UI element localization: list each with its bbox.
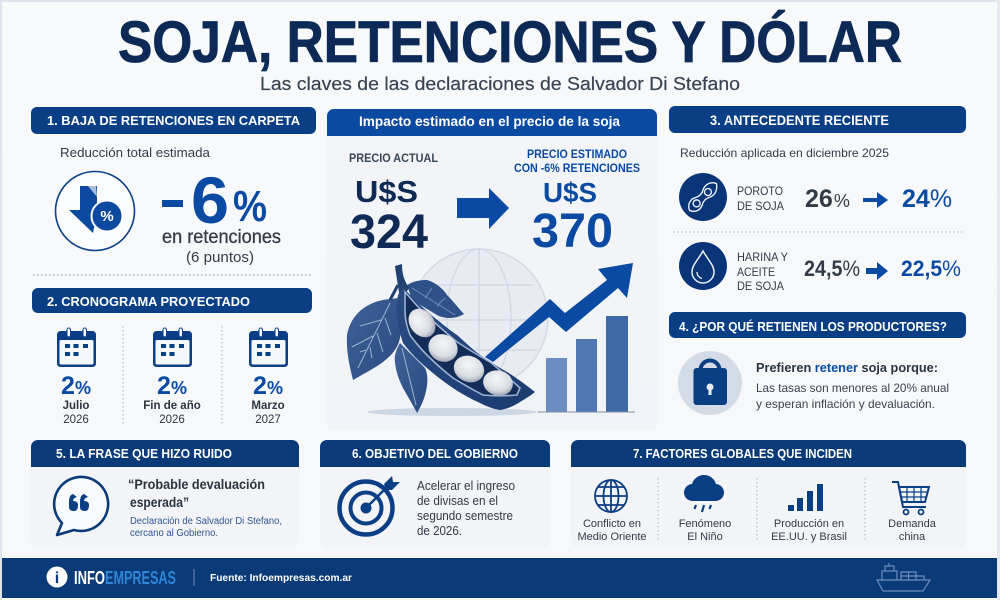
calendar item: julio: 2% [61,372,91,400]
quote [128,476,265,510]
panel 3: antecedente [669,106,966,293]
leaf: bottom [395,343,427,413]
text: prefieren retener: Prefieren retener soja porque: [756,360,938,375]
label: precio estimado [514,147,640,175]
leaf: top [407,280,464,318]
footer [2,558,997,598]
icon: ship [877,563,930,591]
row: harina y aceite: 22,5% [901,256,961,281]
text: 6 puntos: (6 puntos) [186,249,254,266]
text: objetivo [417,479,515,538]
factor: producción [771,484,847,543]
pod body [397,287,535,410]
factor: producción: EE.UU. y Brasil [771,531,847,543]
chart: rising bars [538,316,635,412]
icon: down arrow with percent [56,172,134,250]
row: poroto de soja: DE SOJA [737,199,784,213]
illustration: soy pod and leaves [347,264,537,416]
attribution [130,516,282,539]
heading 3 [669,106,966,133]
attribution: Declaración de Salvador Di Stefano, [130,516,282,527]
factor: demanda china [888,482,937,543]
source: Fuente: Infoempresas.com.ar [210,572,352,584]
pod stem [395,264,409,302]
row: harina y aceite: DE SOJA [737,279,784,293]
price: estimated: U$S [543,177,597,208]
heading 2: 2. CRONOGRAMA PROYECTADO [47,295,250,309]
figure: -6%: % [233,182,267,231]
factor: producción: Producción en [774,518,844,530]
arrow: rising trend [485,263,633,362]
heading 7 [571,440,966,467]
logo: infoempresas: INFO [74,567,105,588]
row: harina y aceite [679,242,961,293]
heading 4 [669,312,966,338]
factor: el niño: Fenómeno [679,518,731,530]
calendar item: marzo: 2027 [255,414,281,426]
heading 6 [320,440,550,467]
icon: info [46,566,68,588]
heading 7: 7. FACTORES GLOBALES QUE INCIDEN [633,447,852,461]
factor: conflicto: Medio Oriente [577,531,647,543]
text: objetivo: Acelerar el ingreso [417,479,515,493]
illustration: globe [410,249,548,387]
text: objetivo: de divisas en el [417,494,498,508]
row: poroto de soja: 24% [902,185,952,213]
figure: -6%: 6 [191,163,229,237]
text: objetivo: segundo semestre [417,509,513,523]
panel 7: factores globales [571,440,966,548]
heading 5: 5. LA FRASE QUE HIZO RUIDO [56,447,232,461]
text: objetivo: de 2026. [417,524,462,538]
heading 4: 4. ¿POR QUÉ RETIENEN LOS PRODUCTORES? [679,319,947,334]
beans [403,303,516,399]
calendar item: julio: Julio [63,400,89,412]
logo: infoempresas: EMPRESAS [105,567,176,588]
calendar item: fin de año [143,328,201,426]
title: SOJA, RETENCIONES Y DÓLAR [118,10,902,75]
row: harina y aceite: 24,5% [804,256,860,281]
calendar item: marzo: Marzo [251,400,285,412]
row: poroto de soja: POROTO [737,184,783,198]
row: poroto de soja [679,173,952,221]
pod cavity [405,292,520,396]
panel 1: baja de retenciones [31,107,316,266]
price: estimated: 370 [532,205,613,258]
factor: el niño: El Niño [687,531,723,543]
subtitle: Las claves de las declaraciones de Salvador Di Stefano [260,74,740,94]
quote: “Probable devaluación [128,476,265,492]
heading: impacto [327,109,657,136]
price: actual [350,174,428,259]
row: harina y aceite: ACEITE [737,265,775,279]
factor: demanda china: china [899,531,926,543]
leaf: left [347,285,401,380]
heading 2 [32,288,312,313]
calendar item: fin de año: 2026 [159,414,185,426]
heading: impacto: Impacto estimado en el precio de la soja [359,113,620,129]
label: precio estimado: CON -6% RETENCIONES [514,161,640,175]
price: actual: U$S [355,174,418,209]
text: en retenciones: en retenciones [162,227,281,248]
calendar item: julio [57,328,96,426]
calendar item: fin de año: Fin de año [143,400,201,412]
price: estimated [532,177,613,258]
panel: impacto en el precio [327,109,657,430]
factor: conflicto [577,480,647,543]
label: precio actual: PRECIO ACTUAL [349,151,438,165]
text: razones: Las tasas son menores al 20% anual [756,381,949,395]
label: diciembre 2025: Reducción aplicada en diciembre 2025 [680,146,889,160]
factor: el niño [679,475,731,543]
panel 5: la frase [31,440,299,548]
text: razones: y esperan inflación y devaluación. [756,397,935,411]
row: poroto de soja: 26% [805,185,850,213]
row: harina y aceite: HARINA Y [737,250,788,264]
calendar item: julio: 2026 [63,414,89,426]
factor: demanda china: Demanda [888,518,937,530]
label: precio estimado: PRECIO ESTIMADO [527,147,627,161]
icon: info: i [55,570,59,587]
heading 5 [31,440,299,467]
heading 6: 6. OBJETIVO DEL GOBIERNO [352,447,518,461]
heading 1: 1. BAJA DE RETENCIONES EN CARPETA [47,114,300,128]
panel 4: por qué retienen [669,312,966,415]
panel 6: objetivo [320,440,550,548]
calendar item: marzo [249,328,288,426]
icon: speech bubble [54,477,108,535]
icon: down arrow with percent: % [100,208,114,225]
price: actual: 324 [350,206,428,259]
icon: target [340,476,400,534]
calendar item: fin de año: 2% [157,372,187,400]
calendar item: marzo: 2% [253,372,283,400]
icon: lock [678,351,742,415]
heading 1 [31,107,316,134]
panel 2: cronograma [32,288,312,426]
logo: infoempresas [74,567,176,588]
factor: conflicto: Conflicto en [583,518,641,530]
heading 3: 3. ANTECEDENTE RECIENTE [710,113,889,128]
attribution: cercano al Gobierno. [130,528,218,539]
text: razones [756,381,949,411]
quote: esperada” [130,494,189,510]
arrow: to estimated [457,188,509,229]
figure: -6% [162,163,267,237]
label: reducción total: Reducción total estimada [60,145,211,160]
